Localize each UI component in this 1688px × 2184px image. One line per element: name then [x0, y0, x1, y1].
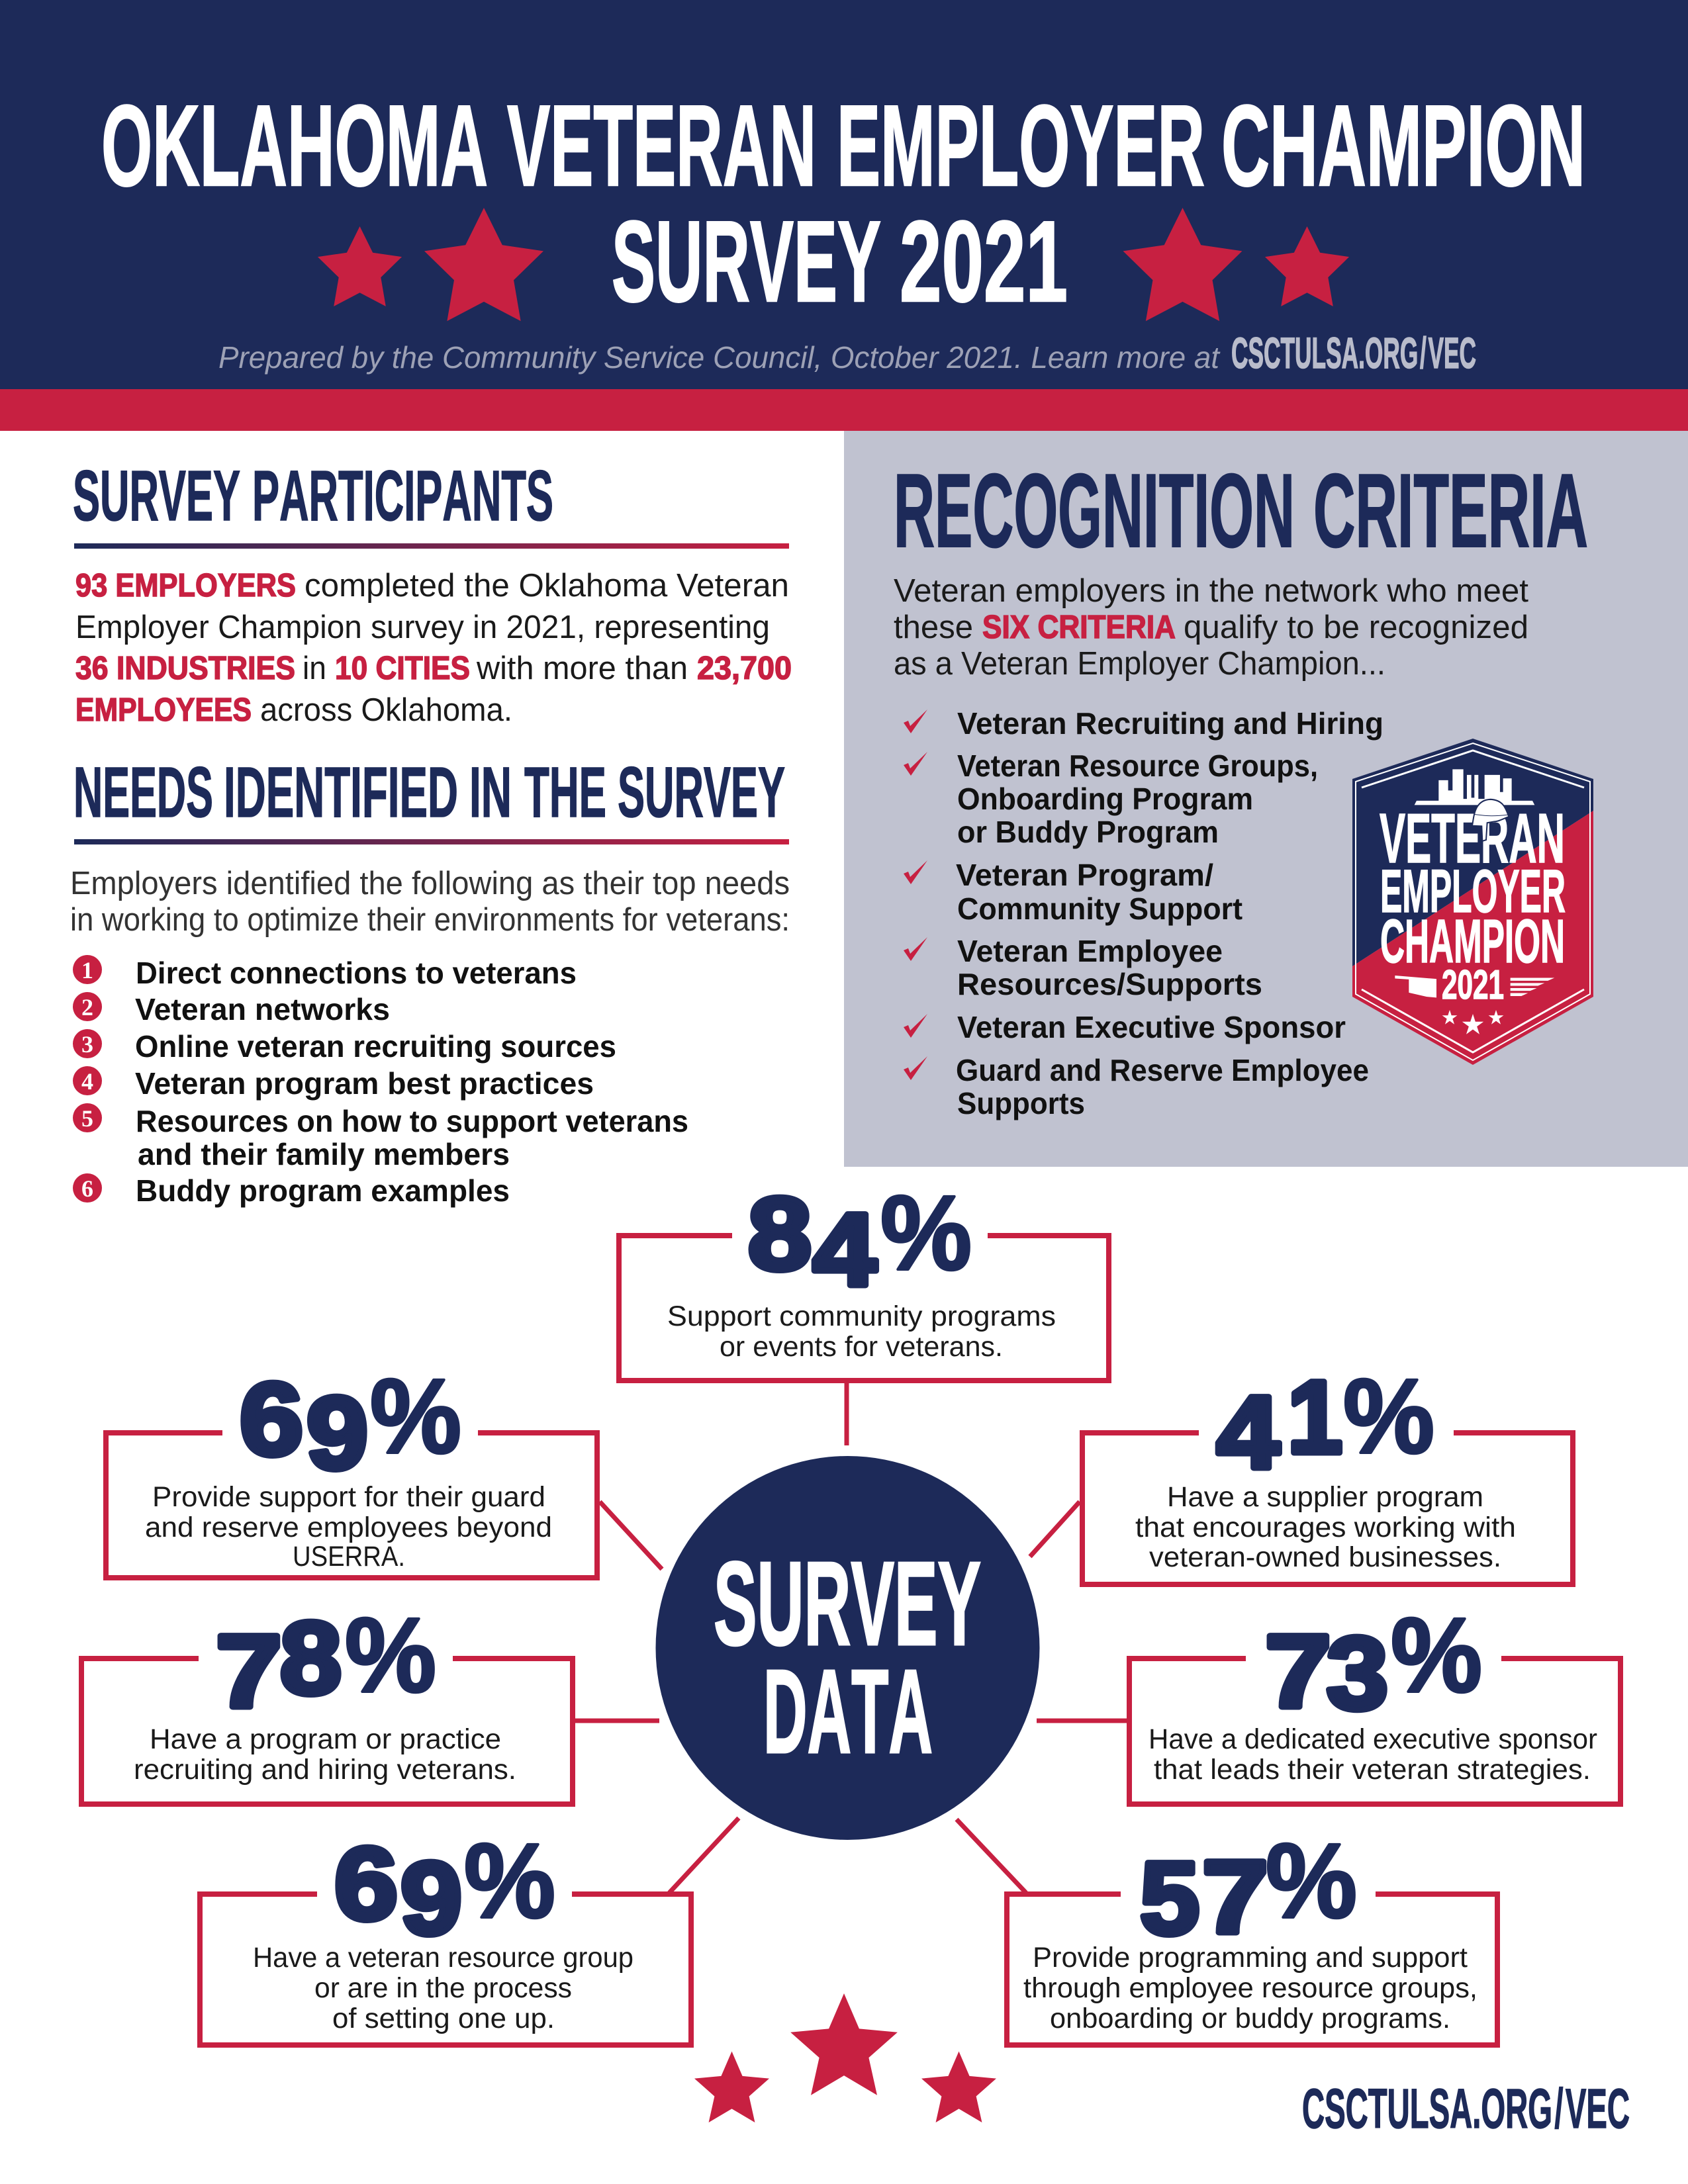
number: 78%: %	[345, 1596, 436, 1714]
panel: survey participants	[73, 455, 792, 728]
text block: participants summary: EMPLOYEES	[75, 692, 252, 728]
description: Have a veteran resource group	[253, 1942, 633, 1974]
criteria list: Onboarding Program	[957, 782, 1253, 816]
description: that encourages working with	[1135, 1512, 1516, 1543]
number: 73%: 7	[1265, 1614, 1331, 1729]
text block: participants summary: 23,700	[697, 651, 792, 686]
icon: check marks	[904, 709, 927, 1080]
criteria list: or Buddy Program	[957, 815, 1219, 849]
text block: criteria intro: qualify to be recognized	[1184, 610, 1528, 645]
list text: Buddy program examples	[136, 1173, 510, 1208]
text block: criteria intro: SIX CRITERIA	[982, 610, 1176, 645]
description: Have a program or practice	[150, 1723, 501, 1755]
criteria list	[956, 706, 1383, 1120]
panel: needs identified	[70, 752, 790, 1208]
description	[667, 1300, 1056, 1363]
connector lines	[575, 1383, 1127, 1893]
stat: 57%	[1007, 1821, 1497, 2045]
heading: recognition criteria: RECOGNITION	[894, 453, 1295, 569]
heading: needs identified	[73, 752, 785, 832]
icon: number bullets	[73, 955, 102, 1203]
text block: participants summary: with more than	[476, 651, 688, 686]
description: Have a dedicated executive sponsor	[1149, 1723, 1597, 1755]
criteria list: Veteran Recruiting and Hiring	[957, 706, 1383, 741]
text block: participants summary: 10 CITIES	[335, 651, 470, 686]
list text: Online veteran recruiting sources	[135, 1029, 616, 1064]
description: Provide programming and support	[1033, 1942, 1468, 1974]
list text: Veteran networks	[135, 992, 390, 1026]
description: that leads their veteran strategies.	[1154, 1754, 1591, 1786]
description	[134, 1723, 516, 1786]
description: through employee resource groups,	[1023, 1972, 1477, 2004]
list text: Direct connections to veterans	[136, 956, 577, 990]
text block: participants summary: in	[303, 651, 326, 686]
number: 73%: 3	[1327, 1616, 1388, 1731]
number: 69%: 6	[240, 1362, 303, 1477]
heading: needs identified: IN	[469, 752, 512, 832]
number: 41%: %	[1343, 1357, 1434, 1475]
text block: participants summary: across Oklahoma.	[260, 692, 512, 728]
criteria list: Supports	[957, 1086, 1085, 1120]
icon: oklahoma outline and wing	[1395, 976, 1554, 997]
description: of setting one up.	[332, 2003, 555, 2034]
number: 69%: %	[370, 1357, 461, 1475]
icon: footer stars	[694, 1993, 996, 2122]
survey data circle: DATA	[763, 1645, 933, 1778]
icon: number bullets: 6	[81, 1175, 93, 1202]
heading: needs identified: NEEDS	[73, 752, 213, 832]
description	[253, 1942, 633, 2034]
stat: 69% guard and reserve	[106, 1357, 597, 1578]
number: 78%	[216, 1596, 436, 1729]
number: 69%: %	[464, 1821, 555, 1940]
number: 69%	[334, 1821, 555, 1956]
icon: number bullets: 4	[81, 1068, 93, 1095]
description: veteran-owned businesses.	[1149, 1541, 1501, 1573]
subtitle: Prepared by the Community Service Council, October 2021. Learn more at	[218, 340, 1221, 375]
stat: 41%	[1082, 1357, 1573, 1584]
heading: needs identified: THE	[524, 752, 606, 832]
stat: 84%	[619, 1173, 1109, 1381]
text block: criteria intro: as a Veteran Employer Champion...	[894, 646, 1385, 682]
heading: survey participants	[73, 455, 553, 535]
list text: Veteran program best practices	[135, 1066, 594, 1101]
description: or events for veterans.	[720, 1331, 1003, 1363]
panel: recognition criteria	[844, 431, 1688, 1167]
stat: 78%	[81, 1596, 573, 1804]
heading: needs identified: IDENTIFIED	[224, 752, 458, 832]
icon: badge stars	[1442, 1010, 1503, 1034]
icon: number bullets: 2	[81, 994, 93, 1021]
survey data circle: SURVEY	[714, 1537, 981, 1670]
criteria list: Community Support	[957, 891, 1243, 926]
description	[1023, 1942, 1477, 2034]
number: 84%	[748, 1173, 972, 1308]
criteria list: Veteran Employee	[957, 934, 1223, 968]
number: 84%: 4	[813, 1193, 876, 1308]
stat: 69% veteran resource group	[200, 1821, 691, 2045]
heading: survey participants: SURVEY	[73, 455, 240, 535]
icon: number bullets: 1	[81, 957, 93, 983]
title: OKLAHOMA	[101, 81, 488, 210]
number: 69%: 6	[334, 1827, 398, 1942]
criteria list: Resources/Supports	[957, 967, 1262, 1001]
subtitle: CSCTULSA.ORG/VEC	[1231, 328, 1476, 377]
text block: participants summary: 93 EMPLOYERS	[75, 568, 296, 604]
number: 73%: %	[1391, 1596, 1482, 1714]
number: 41%: 1	[1288, 1360, 1342, 1475]
text block: participants summary: completed the Oklahoma Veteran	[305, 568, 789, 604]
title: 2021	[900, 197, 1068, 326]
text block: needs intro: Employers identified the following as their top needs	[70, 866, 790, 901]
description: onboarding or buddy programs.	[1050, 2003, 1450, 2034]
number: 84%: %	[880, 1173, 972, 1292]
number: 69%: 9	[400, 1841, 462, 1956]
heading: survey participants: PARTICIPANTS	[252, 455, 553, 535]
number: 73%	[1265, 1596, 1482, 1731]
number: 57%: 5	[1140, 1841, 1199, 1956]
text block: needs intro	[70, 866, 790, 938]
list text: and their family members	[138, 1137, 510, 1171]
icon: number bullets: 5	[81, 1105, 93, 1132]
text block: participants summary	[75, 568, 792, 728]
icon: veteran employer champion badge	[1352, 739, 1593, 1065]
number: 57%: %	[1266, 1821, 1357, 1940]
text block: needs intro: in working to optimize their environments for veterans:	[70, 902, 790, 938]
description	[145, 1481, 552, 1572]
description: USERRA.	[293, 1541, 405, 1572]
icon: skyline	[1415, 769, 1534, 805]
list text	[135, 956, 688, 1208]
text block: criteria intro: these	[894, 610, 973, 645]
icon: helmet	[1472, 799, 1509, 841]
description: Have a supplier program	[1167, 1481, 1483, 1513]
stat: 73%	[1129, 1596, 1620, 1804]
criteria list: Veteran Executive Sponsor	[957, 1010, 1346, 1044]
list text: Resources on how to support veterans	[136, 1104, 688, 1138]
criteria list: Guard and Reserve Employee	[956, 1053, 1369, 1087]
title: SURVEY	[612, 197, 881, 326]
description: Provide support for their guard	[152, 1481, 545, 1513]
text block: participants summary: Employer Champion survey in 2021, representing	[75, 610, 770, 645]
number: 69%	[240, 1357, 461, 1491]
subtitle	[218, 328, 1476, 377]
text block: criteria intro	[894, 573, 1528, 682]
icon: number bullets: 3	[81, 1031, 93, 1058]
number: 57%	[1140, 1821, 1357, 1956]
description: recruiting and hiring veterans.	[134, 1754, 516, 1786]
text block: participants summary: 36 INDUSTRIES	[75, 651, 295, 686]
number: 84%: 8	[748, 1177, 812, 1292]
criteria list: Veteran Program/	[956, 858, 1213, 892]
description: or are in the process	[314, 1972, 572, 2004]
number: 41%: 4	[1217, 1375, 1280, 1490]
description: and reserve employees beyond	[145, 1512, 552, 1543]
description	[1149, 1723, 1597, 1786]
number: 41%	[1217, 1357, 1434, 1490]
header banner	[0, 0, 1688, 431]
icon: header stars	[318, 208, 1349, 321]
numbered list of needs	[73, 955, 688, 1208]
heading: needs identified: SURVEY	[618, 752, 785, 832]
number: 78%: 7	[216, 1614, 282, 1729]
text block: criteria intro: Veteran employers in the network who meet	[894, 573, 1528, 609]
number: 69%: 9	[306, 1376, 368, 1491]
title: VETERAN	[507, 81, 816, 210]
icon: veteran employer champion badge: 2021	[1442, 962, 1504, 1008]
title: EMPLOYER	[837, 81, 1205, 210]
description	[1135, 1481, 1516, 1573]
number: 78%: 8	[280, 1601, 342, 1716]
survey data circle	[655, 1456, 1039, 1840]
criteria list: Veteran Resource Groups,	[957, 749, 1318, 783]
title	[101, 81, 1585, 326]
description: Support community programs	[667, 1300, 1056, 1332]
number: 57%: 7	[1202, 1840, 1268, 1955]
